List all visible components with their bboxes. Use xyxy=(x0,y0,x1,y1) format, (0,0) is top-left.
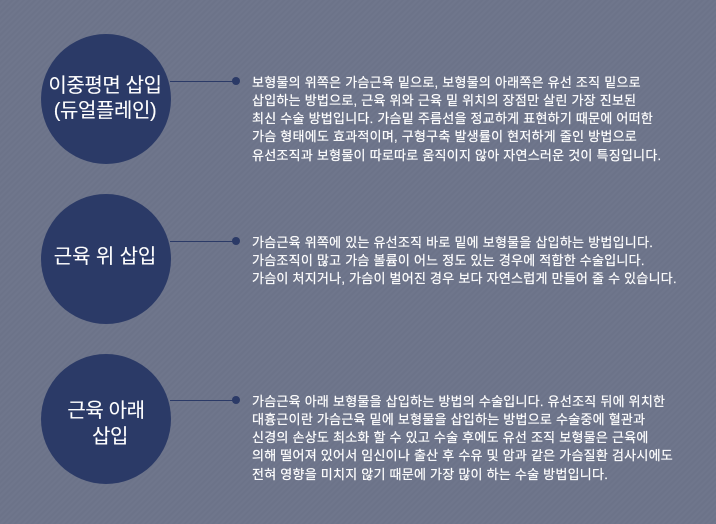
text block: dual plane description: 최신 수술 방법입니다. 가슴밑 주름선을 정교하게 표현하기 때문에 어떠한 xyxy=(252,111,653,126)
text block: below muscle description: 신경의 손상도 최소화 할 수 있고 수술 후에도 유선 조직 보형물은 근육에 xyxy=(252,430,649,445)
connector line 2 xyxy=(170,241,236,242)
connector dot 3 xyxy=(232,396,240,404)
text block: dual plane description: 보형물의 위쪽은 가슴근육 밑으로, 보형물의 아래쪽은 유선 조직 밑으로 xyxy=(252,75,641,90)
text block: below muscle description: 가슴근육 아래 보형물을 삽입하는 방법의 수술입니다. 유선조직 뒤에 위치한 xyxy=(252,394,665,409)
text block: below muscle description xyxy=(252,394,673,482)
text block: below muscle description: 대흉근이란 가슴근육 밑에 보형물을 삽입하는 방법으로 수술중에 혈관과 xyxy=(252,412,645,427)
circle: dual plane insertion xyxy=(41,34,171,164)
circle: below muscle insertion: 근육 아래 xyxy=(67,400,145,422)
connector line 1 xyxy=(170,81,236,82)
connector dot 1 xyxy=(232,77,240,85)
circle: above muscle insertion xyxy=(41,194,171,324)
text block: below muscle description: 전혀 영향을 미치지 않기 때문에 가장 많이 하는 수술 방법입니다. xyxy=(252,467,608,482)
text block: above muscle description: 가슴근육 위쪽에 있는 유선조직 바로 밑에 보형물을 삽입하는 방법입니다. xyxy=(252,235,653,250)
text block: above muscle description xyxy=(252,235,677,286)
text block: dual plane description: 삽입하는 방법으로, 근육 위와 근육 밑 위치의 장점만 살린 가장 진보된 xyxy=(252,93,636,108)
connector line 3 xyxy=(170,400,236,401)
text block: dual plane description xyxy=(252,75,661,163)
circle: below muscle insertion: 삽입 xyxy=(92,426,128,448)
text block: dual plane description: 가슴 형태에도 효과적이며, 구형구축 발생률이 현저하게 줄인 방법으로 xyxy=(252,129,637,144)
circle: dual plane insertion: 이중평면 삽입 xyxy=(48,75,162,97)
connector dot 2 xyxy=(232,237,240,245)
circle: below muscle insertion xyxy=(41,354,171,484)
text block: above muscle description: 가슴조직이 많고 가슴 볼륨이 어느 정도 있는 경우에 적합한 수술입니다. xyxy=(252,253,645,268)
text block: below muscle description: 의해 떨어져 있어서 임신이나 출산 후 수유 및 암과 같은 가슴질환 검사시에도 xyxy=(252,448,673,463)
text block: above muscle description: 가슴이 처지거나, 가슴이 벌어진 경우 보다 자연스럽게 만들어 줄 수 있습니다. xyxy=(252,271,677,286)
circle: above muscle insertion: 근육 위 삽입 xyxy=(54,246,156,268)
circle: dual plane insertion: (듀얼플레인) xyxy=(54,100,156,122)
text block: dual plane description: 유선조직과 보형물이 따로따로 움직이지 않아 자연스러운 것이 특징입니다. xyxy=(252,148,661,163)
